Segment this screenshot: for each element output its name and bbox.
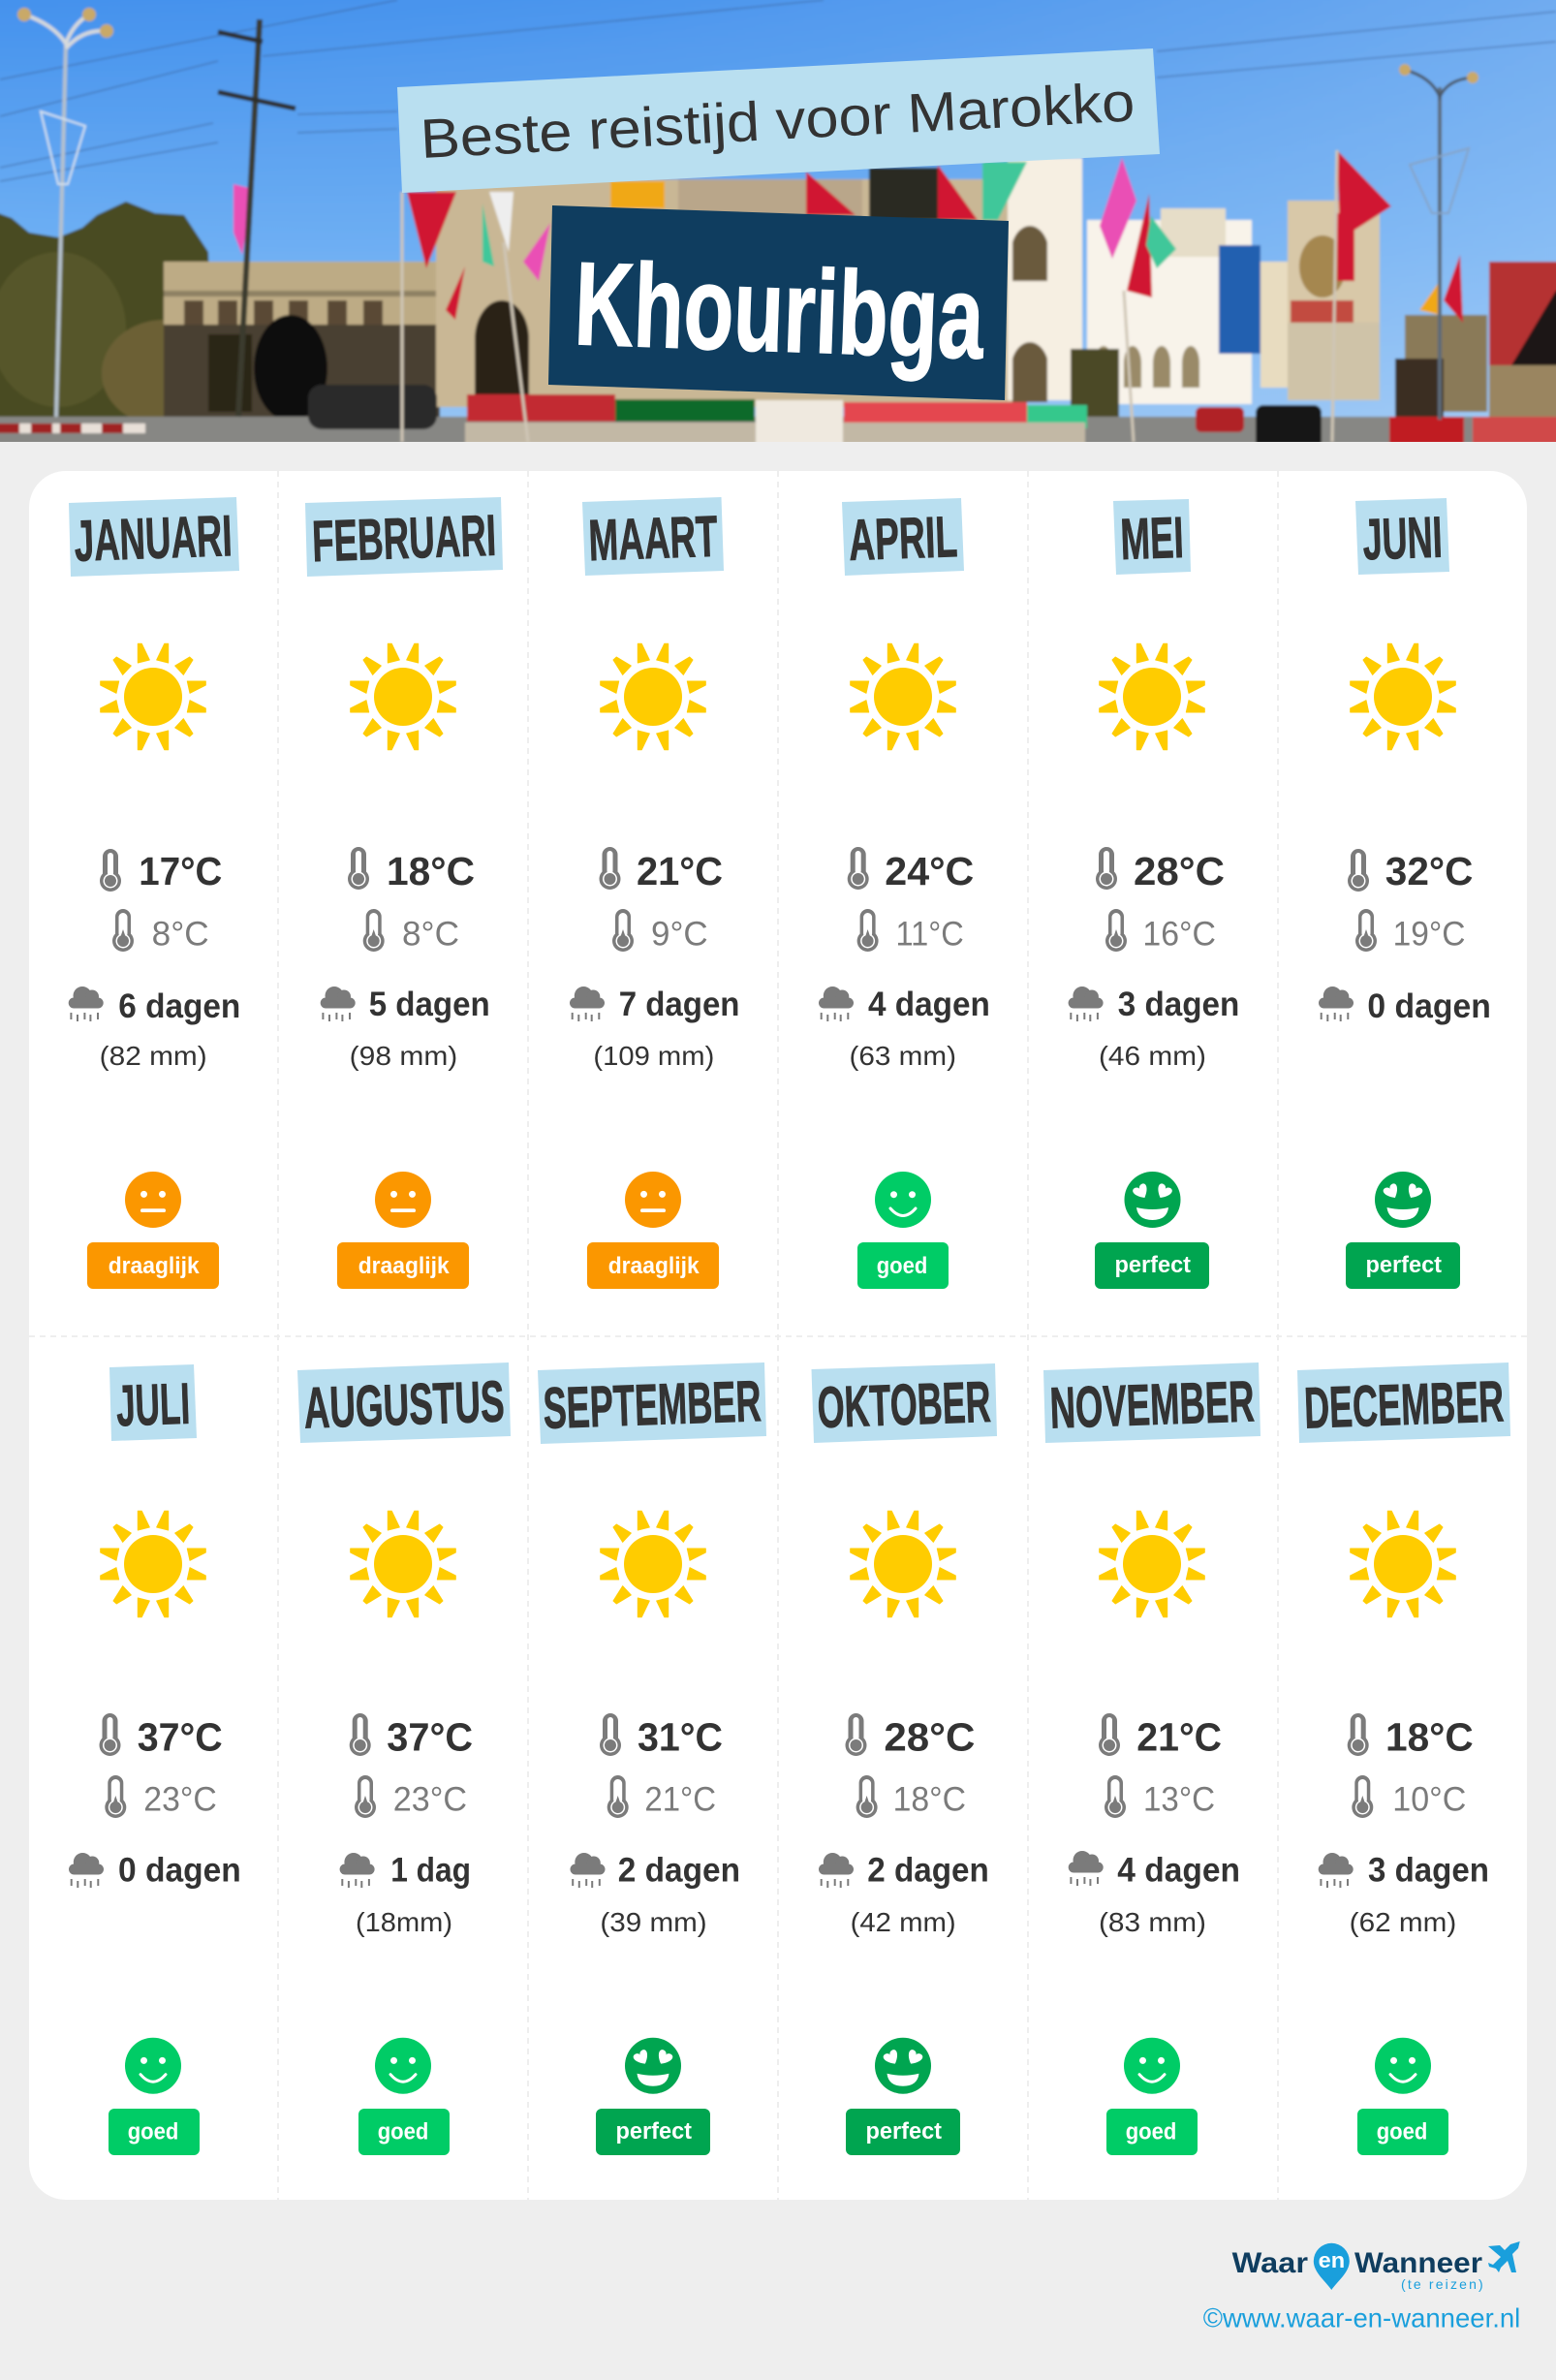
heading: juni: JUNI: [1361, 505, 1444, 572]
badge: draaglijk: draaglijk: [358, 1253, 450, 1279]
low temperature: [112, 909, 209, 954]
city name banner: [548, 205, 1009, 400]
heading: februari: [305, 497, 503, 577]
high temperature: [845, 1713, 975, 1760]
heading: november: NOVEMBER: [1048, 1368, 1256, 1441]
low temperature: [355, 1775, 467, 1819]
badge: goed: [1106, 2109, 1198, 2155]
heading: juli: JULI: [115, 1371, 191, 1438]
badge: perfect: perfect: [866, 2118, 942, 2145]
high temperature: [848, 847, 974, 893]
logo: Waar en Wanneer: en: [1319, 2248, 1345, 2272]
icon: sun: [601, 1511, 705, 1617]
low temperature: 16°C: [1142, 916, 1216, 954]
icon: sun: [601, 643, 705, 750]
high temperature: [100, 849, 222, 893]
high temperature: [99, 1713, 223, 1760]
low temperature: 11°C: [895, 916, 964, 954]
rain days: 6 dagen: [118, 987, 240, 1025]
month: mei: [1069, 499, 1239, 1289]
low temperature: [856, 1775, 966, 1819]
rainfall: (18mm): [356, 1907, 452, 1937]
low temperature: [1105, 909, 1216, 954]
low temperature: [607, 1775, 716, 1819]
month: december: [1297, 1362, 1510, 2155]
high temperature: 18°C: [387, 849, 475, 893]
icon: map pin: [1314, 2243, 1350, 2290]
high temperature: 28°C: [1134, 849, 1225, 893]
icon: happy face: [125, 2038, 181, 2094]
rainfall: (42 mm): [851, 1907, 956, 1937]
high temperature: 17°C: [139, 849, 222, 893]
heading: maart: [582, 497, 724, 576]
icon: heart-eyes face: [625, 2038, 681, 2094]
heading: mei: [1113, 499, 1191, 575]
rainfall: (39 mm): [600, 1907, 707, 1937]
copyright url: ©www.waar-en-wanneer.nl: [1203, 2303, 1520, 2333]
icon: happy face: [1375, 2038, 1431, 2094]
icon: sun: [351, 1511, 455, 1617]
icon: heart-eyes face: [875, 2038, 931, 2094]
badge: goed: goed: [378, 2119, 428, 2145]
rain days: [819, 986, 990, 1023]
heading: januari: [69, 497, 239, 577]
badge: perfect: perfect: [1114, 1252, 1191, 1278]
rain days: [570, 1852, 740, 1890]
icon: happy face: [375, 2038, 431, 2094]
badge: goed: goed: [128, 2119, 178, 2145]
low temperature: [1352, 1775, 1466, 1819]
icon: heart-eyes face: [1375, 1172, 1431, 1228]
heading: juli: [109, 1364, 197, 1441]
high temperature: 18°C: [1385, 1715, 1474, 1760]
high temperature: 24°C: [885, 849, 974, 893]
rain days: 0 dagen: [1367, 987, 1491, 1025]
rain days: 4 dagen: [868, 986, 990, 1023]
badge: perfect: perfect: [1366, 1252, 1442, 1278]
rain days: 0 dagen: [118, 1852, 241, 1890]
rain days: 1 dag: [390, 1852, 471, 1890]
badge: draaglijk: [587, 1242, 719, 1289]
rain days: 4 dagen: [1117, 1852, 1240, 1890]
city name banner: Khouribga: [573, 237, 986, 384]
heading: november: [1043, 1362, 1260, 1443]
badge: draaglijk: [87, 1242, 219, 1289]
high temperature: [1348, 1713, 1474, 1760]
icon: sun: [1351, 1511, 1455, 1617]
badge: goed: goed: [1377, 2119, 1427, 2145]
title banner: Beste reistijd voor Marokko: [419, 71, 1136, 171]
header photo: Khouribga street: [0, 0, 1556, 471]
rain days: [69, 1852, 241, 1890]
high temperature: 37°C: [138, 1715, 223, 1760]
month: april: [819, 498, 990, 1289]
rainfall: (82 mm): [100, 1041, 207, 1071]
badge: goed: goed: [877, 1253, 927, 1279]
low temperature: [612, 909, 708, 954]
icon: sun: [1100, 1511, 1204, 1617]
low temperature: 23°C: [143, 1781, 217, 1819]
icon: sun: [851, 643, 955, 750]
high temperature: [600, 1713, 723, 1760]
badge: goed: [857, 1242, 949, 1289]
heading: mei: MEI: [1119, 505, 1185, 572]
icon: neutral face: [375, 1172, 431, 1228]
heading: augustus: [297, 1362, 511, 1443]
rainfall: (63 mm): [849, 1041, 956, 1071]
title banner: [397, 48, 1160, 193]
rain days: 5 dagen: [369, 986, 490, 1023]
month: maart: [570, 497, 740, 1289]
rain days: 3 dagen: [1368, 1852, 1489, 1890]
low temperature: 10°C: [1392, 1781, 1466, 1819]
low temperature: 18°C: [893, 1781, 966, 1819]
high temperature: 37°C: [387, 1715, 473, 1760]
month: juli: [69, 1364, 241, 2155]
icon: neutral face: [125, 1172, 181, 1228]
low temperature: 13°C: [1143, 1781, 1215, 1819]
high temperature: 21°C: [1136, 1715, 1222, 1760]
rainfall: (98 mm): [350, 1041, 457, 1071]
rain days: [340, 1852, 471, 1890]
high temperature: 28°C: [884, 1715, 975, 1760]
heading: oktober: [812, 1363, 997, 1443]
rainfall: (109 mm): [593, 1041, 714, 1071]
high temperature: 21°C: [637, 849, 723, 893]
low temperature: 19°C: [1393, 916, 1465, 954]
low temperature: [857, 909, 964, 954]
rain days: [321, 986, 490, 1023]
heading: augustus: AUGUSTUS: [302, 1368, 506, 1441]
badge: goed: [109, 2109, 200, 2155]
badge: goed: [358, 2109, 450, 2155]
icon: sun: [351, 643, 455, 750]
icon: neutral face: [625, 1172, 681, 1228]
icon: sun: [101, 643, 205, 750]
heading: januari: JANUARI: [73, 503, 233, 574]
heading: maart: MAART: [587, 504, 719, 573]
icon: airplane: [1488, 2241, 1520, 2272]
month: november: [1043, 1362, 1260, 2155]
icon: sun: [851, 1511, 955, 1617]
badge: draaglijk: draaglijk: [608, 1253, 700, 1279]
month: februari: [305, 497, 503, 1289]
badge: goed: [1357, 2109, 1448, 2155]
rain days: [1319, 986, 1491, 1025]
icon: sun: [1351, 643, 1455, 750]
rain days: [1069, 986, 1239, 1023]
rainfall: (46 mm): [1099, 1041, 1206, 1071]
month: september: [538, 1362, 766, 2155]
low temperature: 23°C: [393, 1781, 467, 1819]
rainfall: (83 mm): [1099, 1907, 1206, 1937]
logo: Waar en Wanneer: Wanneer: [1354, 2247, 1482, 2279]
rain days: 7 dagen: [619, 986, 740, 1023]
high temperature: [350, 1713, 473, 1760]
icon: happy face: [1124, 2038, 1180, 2094]
month: januari: [69, 497, 240, 1289]
high temperature: 32°C: [1385, 849, 1473, 893]
rain days: 3 dagen: [1118, 986, 1239, 1023]
low temperature: 8°C: [402, 916, 459, 954]
logo: Waar en Wanneer: Waar: [1232, 2247, 1308, 2279]
heading: september: [538, 1362, 766, 1444]
icon: sun: [1100, 643, 1204, 750]
low temperature: [363, 909, 459, 954]
badge: perfect: [1346, 1242, 1460, 1289]
high temperature: [1099, 1713, 1222, 1760]
month: juni: [1319, 498, 1491, 1289]
rain days: [1069, 1851, 1240, 1890]
panel: monthly climate table: [29, 471, 1527, 2200]
month: oktober: [812, 1363, 997, 2155]
badge: draaglijk: [337, 1242, 469, 1289]
high temperature: [599, 847, 723, 893]
high temperature: [1348, 849, 1473, 893]
rain days: 2 dagen: [867, 1852, 989, 1890]
logo: Waar en Wanneer: [1232, 2241, 1520, 2292]
badge: perfect: [596, 2109, 710, 2155]
rain days: [1319, 1852, 1489, 1890]
low temperature: [1105, 1775, 1215, 1819]
badge: perfect: [846, 2109, 960, 2155]
rain days: 2 dagen: [618, 1852, 740, 1890]
low temperature: [105, 1775, 217, 1819]
heading: oktober: OKTOBER: [816, 1369, 992, 1440]
heading: juni: [1355, 498, 1449, 575]
rainfall: (62 mm): [1350, 1907, 1456, 1937]
heading: april: APRIL: [848, 504, 958, 573]
low temperature: 21°C: [644, 1781, 716, 1819]
high temperature: 31°C: [638, 1715, 723, 1760]
rain days: [69, 986, 240, 1025]
high temperature: [1096, 847, 1225, 893]
heading: februari: FEBRUARI: [311, 503, 497, 574]
low temperature: [1355, 909, 1465, 954]
logo: Waar en Wanneer: (te reizen): [1401, 2276, 1483, 2292]
high temperature: [348, 847, 475, 893]
icon: sun: [101, 1511, 205, 1617]
badge: perfect: [1095, 1242, 1209, 1289]
heading: september: SEPTEMBER: [542, 1368, 762, 1441]
badge: goed: goed: [1126, 2119, 1176, 2145]
rain days: [819, 1852, 989, 1890]
badge: perfect: perfect: [616, 2118, 692, 2145]
month: augustus: [297, 1362, 511, 2155]
heading: april: [842, 498, 964, 576]
rain days: [570, 986, 740, 1023]
icon: happy face: [875, 1172, 931, 1228]
badge: draaglijk: draaglijk: [109, 1253, 200, 1279]
low temperature: 9°C: [651, 916, 708, 954]
low temperature: 8°C: [152, 916, 209, 954]
icon: heart-eyes face: [1124, 1172, 1180, 1228]
